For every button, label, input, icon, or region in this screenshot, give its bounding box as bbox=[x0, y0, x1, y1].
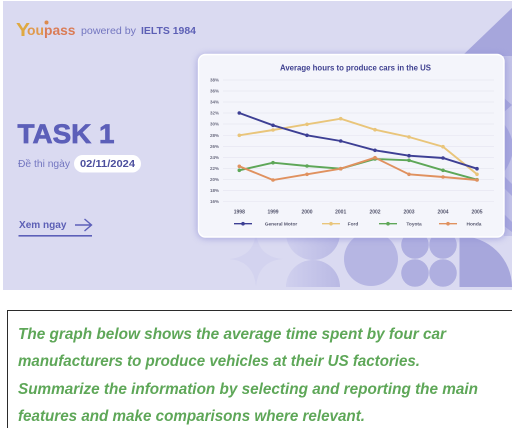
card shadow bbox=[197, 54, 506, 239]
y axis labels: 26% bbox=[210, 144, 219, 149]
date pill: 02/11/2024 bbox=[80, 159, 135, 170]
legend: General Motor bbox=[265, 222, 297, 228]
x axis labels: 2005 bbox=[471, 210, 483, 216]
x axis labels bbox=[234, 210, 483, 216]
legend: Ford bbox=[348, 222, 358, 228]
logo: Y bbox=[16, 20, 30, 40]
decorative shapes bbox=[229, 8, 512, 287]
y axis labels: 36% bbox=[210, 88, 219, 94]
y axis labels: 34% bbox=[210, 100, 219, 104]
line: Ford bbox=[238, 117, 479, 176]
prompt text: manufacturers to produce vehicles at their US factories. bbox=[18, 353, 420, 370]
y axis labels: 18% bbox=[210, 188, 219, 193]
x axis labels: 1998 bbox=[234, 210, 245, 216]
y axis labels: 22% bbox=[210, 166, 219, 171]
legend: Honda bbox=[467, 222, 482, 228]
x axis labels: 2004 bbox=[437, 210, 449, 216]
logo: ou bbox=[27, 23, 44, 38]
x axis labels: 2001 bbox=[335, 210, 346, 216]
IELTS 1984 brand: IELTS 1984 bbox=[141, 26, 196, 37]
y axis labels: 30% bbox=[210, 122, 219, 126]
x axis labels: 2003 bbox=[403, 210, 415, 216]
link: Xem ngay with arrow bbox=[18, 219, 92, 237]
powered by label: powered by bbox=[81, 26, 136, 37]
y axis labels: 38% bbox=[210, 78, 219, 82]
x axis labels: 2000 bbox=[301, 210, 313, 216]
line: General Motor bbox=[238, 111, 479, 170]
legend: Toyota bbox=[406, 222, 422, 228]
grid lines bbox=[223, 80, 494, 202]
prompt text: Summarize the information by selecting and reporting the main bbox=[18, 381, 478, 398]
line: Honda bbox=[238, 156, 479, 182]
y axis labels: 28% bbox=[210, 133, 219, 138]
exam date label: Đề thi ngày bbox=[18, 158, 70, 170]
prompt text: The graph below shows the average time spent by four car bbox=[18, 326, 447, 343]
y axis labels: 32% bbox=[210, 110, 219, 116]
y axis labels: 24% bbox=[210, 155, 219, 160]
banner background bbox=[3, 1, 512, 290]
date pill bbox=[74, 155, 141, 172]
prompt text: features and make comparisons where relevant. bbox=[18, 408, 365, 425]
prompt text bbox=[18, 326, 478, 425]
logo: pass bbox=[44, 23, 76, 38]
x axis labels: 2002 bbox=[369, 210, 381, 216]
y axis labels bbox=[210, 78, 219, 204]
line: Toyota bbox=[238, 157, 479, 182]
y axis labels: 20% bbox=[210, 177, 219, 182]
x axis labels: 1999 bbox=[267, 210, 279, 216]
legend bbox=[234, 222, 482, 228]
logo bbox=[16, 20, 76, 40]
panel: task prompt box bbox=[8, 310, 512, 428]
y axis labels: 16% bbox=[210, 199, 219, 204]
title: TASK 1: TASK 1 bbox=[18, 119, 114, 149]
chart title: Average hours to produce cars in the US bbox=[280, 64, 432, 72]
panel: chart card bbox=[198, 54, 504, 237]
link: Xem ngay with arrow: Xem ngay bbox=[19, 220, 67, 231]
